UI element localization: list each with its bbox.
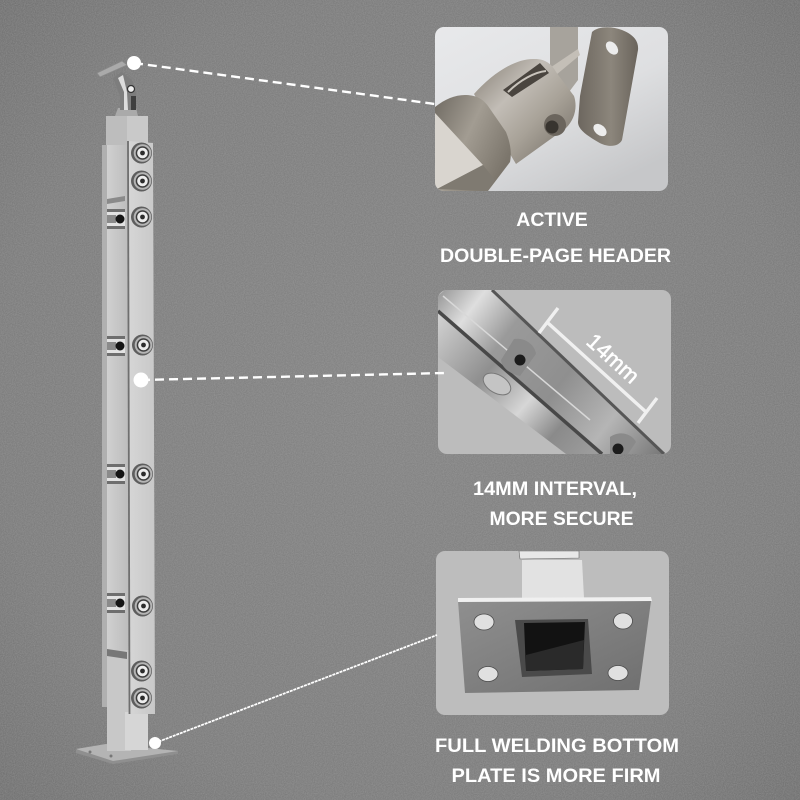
tube shadow face — [438, 165, 486, 190]
right screws — [131, 142, 153, 708]
caption: bottom plate: FULL WELDING BOTTOM — [435, 735, 679, 757]
square tube — [435, 113, 483, 191]
dot: top — [127, 56, 141, 70]
tube — [519, 551, 584, 598]
caption: active header: DOUBLE-PAGE HEADER — [440, 245, 671, 267]
tab — [552, 49, 580, 74]
left strip — [102, 145, 107, 707]
leader line: top — [134, 63, 435, 104]
slot — [503, 63, 549, 97]
plate — [458, 601, 651, 693]
caption: 14mm interval — [473, 478, 637, 530]
base plate — [76, 744, 178, 764]
upper tube — [438, 290, 664, 454]
dimension label: 14mm — [582, 328, 644, 388]
panel: 14mm photo — [438, 290, 671, 454]
gap — [438, 311, 602, 454]
upper band — [107, 196, 125, 204]
plate holes — [474, 613, 632, 682]
caption: 14mm interval: 14MM INTERVAL, — [473, 478, 637, 500]
dimension line — [539, 308, 657, 423]
square opening — [515, 619, 592, 677]
screw hole bottom — [610, 433, 636, 454]
leader line: bottom — [155, 635, 437, 743]
dark edge — [492, 290, 664, 454]
hex socket — [544, 114, 566, 136]
left connectors — [107, 209, 125, 613]
collar — [435, 95, 511, 191]
top inner tube — [106, 116, 148, 148]
screw hole upper — [501, 339, 536, 376]
panel: bottom plate photo — [436, 551, 669, 715]
caption: bottom plate — [435, 735, 679, 787]
tube highlight line — [443, 296, 590, 420]
screw lower — [482, 372, 512, 396]
plate top edge — [458, 597, 652, 602]
lower section step — [107, 649, 127, 659]
center groove — [128, 141, 130, 714]
swivel body — [474, 59, 576, 164]
dot: bottom — [149, 737, 161, 749]
panel: active header photo — [435, 27, 668, 191]
top swivel bracket — [97, 61, 138, 116]
back strip — [550, 27, 578, 96]
lower tube — [438, 313, 600, 454]
caption: bottom plate: PLATE IS MORE FIRM — [452, 765, 660, 787]
dot: middle — [134, 372, 148, 388]
caption: active header — [440, 209, 671, 267]
leader line: middle — [141, 373, 445, 380]
left face — [107, 145, 129, 650]
bracket plate — [578, 27, 638, 146]
lower inner tube — [107, 650, 148, 751]
right face — [128, 141, 155, 714]
railing post illustration — [76, 61, 178, 764]
caption: 14mm interval: MORE SECURE — [490, 508, 634, 530]
caption: active header: ACTIVE — [516, 209, 588, 231]
